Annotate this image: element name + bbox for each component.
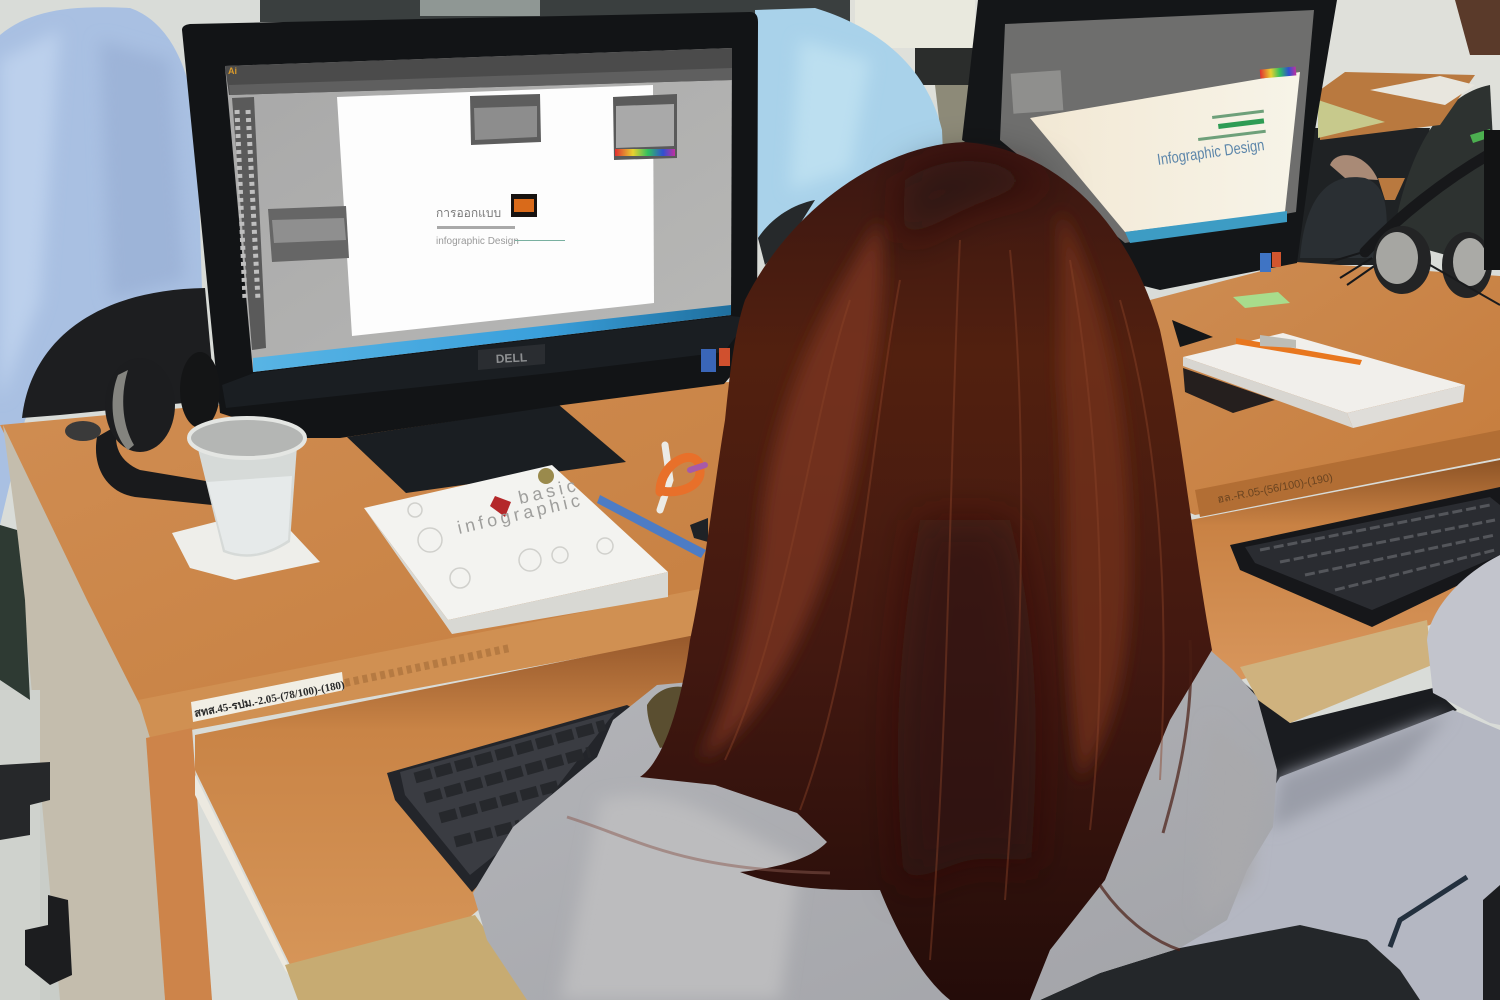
- artboard content: infographic Design: [436, 236, 519, 247]
- floating panel: color: [613, 94, 677, 160]
- rear desk, far right: [1318, 72, 1475, 200]
- software menu bar: [225, 48, 732, 95]
- right monitor base: [1172, 320, 1213, 347]
- person in light blue shirt, centre: [755, 8, 945, 265]
- left floor and chair base: [0, 525, 72, 1000]
- person in blue shirt, left: [0, 7, 202, 525]
- loose hair strands over jacket: [567, 640, 1191, 950]
- left monitor stand: [347, 405, 626, 493]
- book title: basic: [516, 475, 577, 508]
- person far right: [1330, 0, 1500, 270]
- dark room area behind right monitor: [1296, 128, 1430, 265]
- chair, back right: [1300, 177, 1387, 258]
- monitor logo: [478, 344, 545, 370]
- tissue under cup: [172, 522, 320, 580]
- plastic cup of water: [189, 418, 305, 557]
- woman's long hair: [567, 142, 1212, 1000]
- right keyboard: [1230, 487, 1500, 627]
- desk side panel: [3, 425, 165, 1000]
- right monitor screen: [1000, 10, 1314, 243]
- notebook, right desk: [1183, 333, 1465, 428]
- left monitor: [182, 12, 758, 438]
- floating panel: transform: [470, 94, 541, 145]
- book title: infographic: [455, 490, 582, 538]
- keyboard shelf: [195, 630, 720, 965]
- floating panel: pathfinder: [268, 206, 349, 262]
- artboard content: [436, 194, 565, 247]
- dark fabric under right shelf: [1235, 675, 1457, 795]
- monitor stickers: [701, 348, 730, 372]
- left monitor screen: [225, 48, 732, 372]
- monitor logo: DELL: [495, 350, 527, 366]
- chair, back left: [22, 288, 215, 418]
- left desk: [0, 382, 730, 1000]
- artboard: [337, 85, 654, 336]
- woman's grey jacket: [473, 640, 1277, 1000]
- right headphones: [1330, 130, 1500, 305]
- screen text: Infographic Design: Infographic Design: [1156, 137, 1266, 169]
- neighbour's grey sleeve and body, lower right: [1170, 555, 1500, 1000]
- right desk top: [1150, 262, 1500, 680]
- desk label, left desk: สทส.45-รปม.-2.05-(78/100)-(180): [193, 678, 346, 720]
- engraved marks: [345, 648, 510, 683]
- artboard content: การออกแบบ: [436, 206, 501, 220]
- left headphones: [65, 352, 220, 505]
- phone, right desk: [1183, 368, 1275, 413]
- blue pen: [597, 495, 706, 558]
- pen on notebook: [1236, 335, 1362, 365]
- infographic book: [364, 465, 668, 634]
- wooden front edge of right shelf: [1240, 620, 1432, 723]
- front keyboard: [387, 705, 640, 892]
- front chair, bottom: [1040, 925, 1420, 1000]
- tool panel: [232, 97, 266, 350]
- green note on right desk: [1233, 292, 1290, 308]
- right monitor: [962, 0, 1337, 290]
- left monitor screen: Ai: [228, 66, 237, 76]
- desk label, right desk: ฮล.-R.05-(56/100)-(190): [1216, 472, 1334, 506]
- orange cable: [660, 445, 705, 510]
- small dark object by the pen: [690, 518, 708, 542]
- wristwatch: [647, 687, 683, 748]
- taskbar: [253, 305, 731, 372]
- desk leg: [146, 728, 212, 1000]
